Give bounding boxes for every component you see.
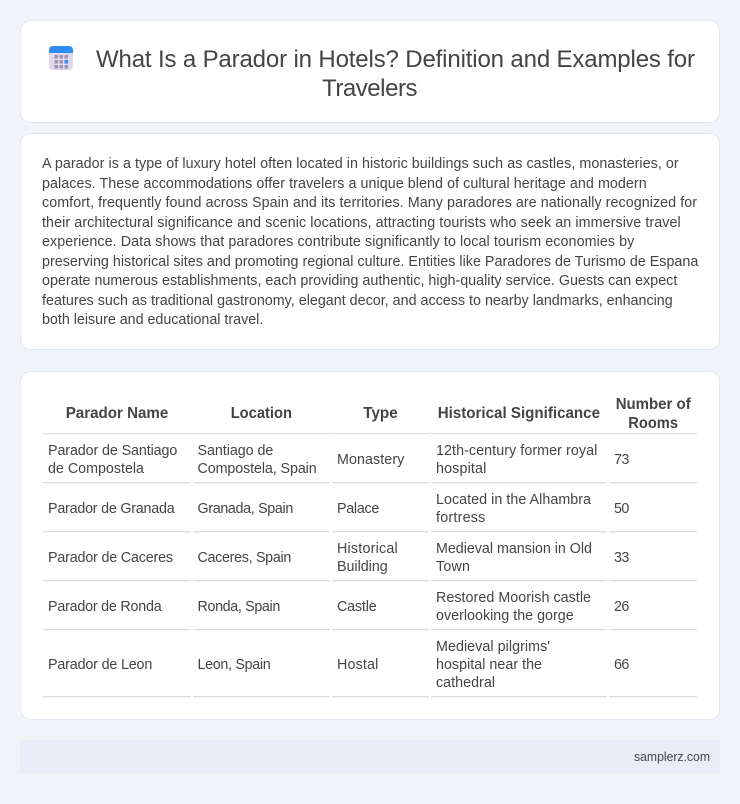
table row: Leon: Hostal bbox=[337, 657, 378, 673]
title: Travelers bbox=[322, 75, 418, 102]
table header: Rooms bbox=[628, 415, 678, 432]
table row: Caceres: 33 bbox=[614, 550, 629, 566]
table header: Parador Name bbox=[66, 405, 168, 422]
table row: Caceres: Town bbox=[436, 559, 470, 575]
table row: Santiago de Compostela: Monastery bbox=[337, 452, 405, 468]
text block: parador description: their architectural significance and scenic locations, attracting tourists who seek an immersive travel bbox=[42, 215, 681, 231]
icon: calendar bbox=[49, 46, 73, 70]
table header: Historical Significance bbox=[438, 405, 600, 422]
panel: table card bbox=[20, 372, 720, 720]
table row: Leon: cathedral bbox=[436, 675, 495, 691]
table row: Ronda: Restored Moorish castle bbox=[436, 590, 591, 606]
text block: parador description: comfort, frequently found across Spain and its territories. Many paradores are nationally recognized for bbox=[42, 195, 697, 211]
table row: Granada: Parador de Granada bbox=[48, 501, 175, 517]
text block: parador description: palaces. These accommodations offer travelers a unique blend of cultural heritage and modern bbox=[42, 176, 647, 192]
footer: samplerz.com bbox=[634, 749, 710, 764]
table row: Santiago de Compostela: Parador de Santiago bbox=[48, 443, 177, 459]
text block: parador description: experience. Data shows that paradores contribute significantly to local tourism economies by bbox=[42, 234, 635, 250]
text block: parador description: both leisure and educational travel. bbox=[42, 312, 263, 328]
table header: Location bbox=[231, 405, 292, 422]
table row: Granada: 50 bbox=[614, 501, 629, 517]
table row: Santiago de Compostela: 12th-century former royal bbox=[436, 443, 597, 459]
text block: parador description: preserving historical sites and promoting regional culture. Entities like Paradores de Turismo de Espana bbox=[42, 254, 698, 270]
table row: Caceres: Caceres, Spain bbox=[198, 550, 291, 566]
title bbox=[96, 46, 695, 102]
table row: Ronda: 26 bbox=[614, 599, 629, 615]
table row: Santiago de Compostela: de Compostela bbox=[48, 461, 144, 477]
table header: Number of bbox=[616, 396, 691, 413]
table row: Caceres: Medieval mansion in Old bbox=[436, 541, 592, 557]
table row: Granada bbox=[43, 492, 697, 532]
table row: Leon: 66 bbox=[614, 657, 629, 673]
panel: title card bbox=[20, 20, 720, 122]
panel: description bbox=[20, 134, 720, 350]
footer bbox=[20, 740, 720, 774]
title: What Is a Parador in Hotels? Definition and Examples for bbox=[96, 46, 695, 73]
table row: Leon: Parador de Leon bbox=[48, 657, 152, 673]
table row: Granada: Granada, Spain bbox=[198, 501, 293, 517]
table row: Leon bbox=[43, 639, 697, 697]
text block: parador description: features such as traditional gastronomy, elegant decor, and access to nearby landmarks, enhancing bbox=[42, 293, 673, 309]
table row: Santiago de Compostela: Compostela, Spain bbox=[198, 461, 317, 477]
table row: Ronda bbox=[43, 590, 697, 630]
table row: Leon: Medieval pilgrims' bbox=[436, 639, 550, 655]
table header: Type bbox=[363, 405, 398, 422]
table header bbox=[43, 396, 697, 434]
text block: parador description: operate numerous establishments, each providing authentic, high-quality service. Guests can expect bbox=[42, 273, 677, 289]
table row: Santiago de Compostela: Santiago de bbox=[198, 443, 273, 459]
table row: Santiago de Compostela: 73 bbox=[614, 452, 629, 468]
table row: Ronda: Castle bbox=[337, 599, 377, 615]
table row: Granada: Located in the Alhambra bbox=[436, 492, 591, 508]
table row: Caceres: Historical bbox=[337, 541, 398, 557]
text block: parador description bbox=[42, 156, 698, 328]
table row: Caceres: Building bbox=[337, 559, 388, 575]
table row: Ronda: Ronda, Spain bbox=[198, 599, 280, 615]
table row: Leon: hospital near the bbox=[436, 657, 542, 673]
table row: Caceres bbox=[43, 541, 697, 581]
text block: parador description: A parador is a type of luxury hotel often located in historic buildings such as castles, monasteries, or bbox=[42, 156, 679, 172]
table row: Ronda: overlooking the gorge bbox=[436, 608, 574, 624]
table row: Santiago de Compostela bbox=[43, 443, 697, 483]
table row: Santiago de Compostela: hospital bbox=[436, 461, 486, 477]
table row: Granada: Palace bbox=[337, 501, 379, 517]
table row: Granada: fortress bbox=[436, 510, 485, 526]
table row: Caceres: Parador de Caceres bbox=[48, 550, 173, 566]
table row: Leon: Leon, Spain bbox=[198, 657, 271, 673]
table row: Ronda: Parador de Ronda bbox=[48, 599, 162, 615]
